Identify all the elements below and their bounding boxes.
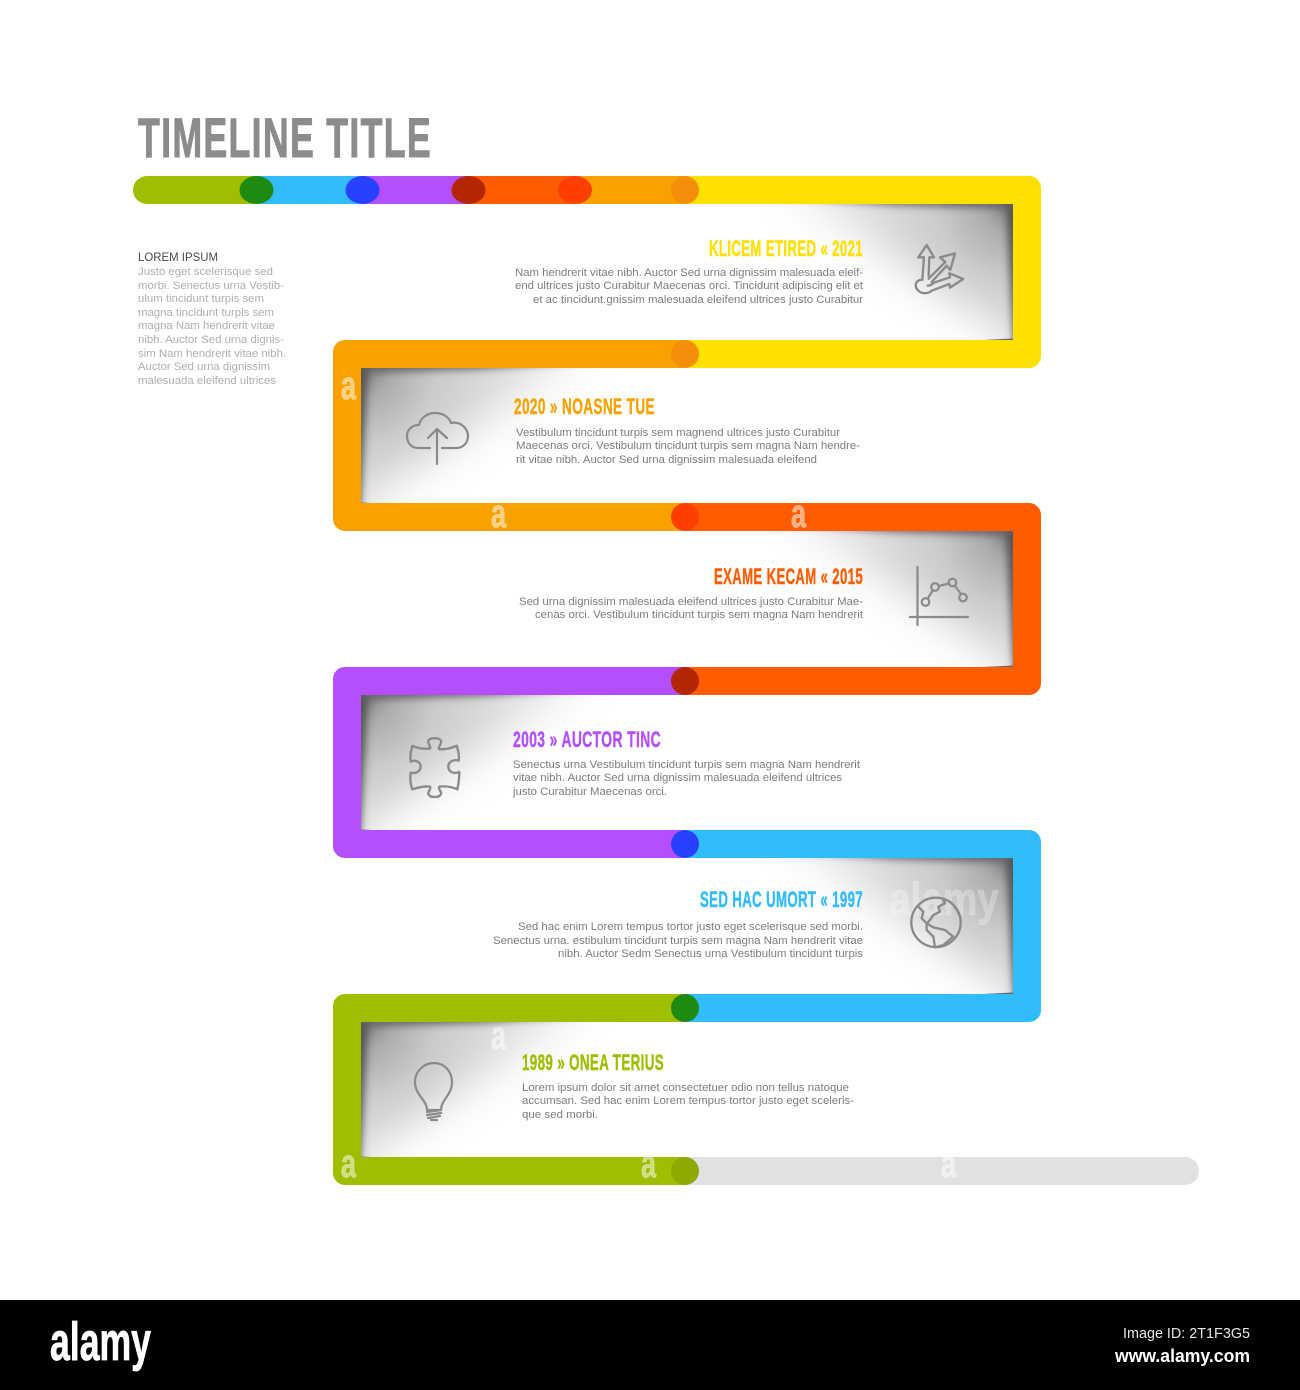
- panel: 2021: end ultrices justo Curabitur Maecenas orci. Tincidunt adipiscing elit et: [515, 280, 864, 292]
- footer url: www.alamy.com: [1114, 1346, 1250, 1366]
- panel: 2020: Vestibulum tincidunt turpis sem magnend ultrices justo Curabitur: [516, 427, 840, 439]
- title: a: [340, 122, 350, 149]
- side note: [138, 252, 286, 387]
- panel: 2021: Nam hendrerit vitae nibh. Auctor Sed urna dignissim malesuada eleif-: [515, 267, 863, 279]
- panel: 2020: [333, 288, 961, 588]
- panel: 2021: et ac tincidunt.gnissim malesuada eleifend ultrices justo Curabitur: [533, 294, 863, 306]
- panel: 2003: [333, 615, 961, 915]
- panel: 2003: 2003 » AUCTOR TINC: [513, 727, 661, 752]
- watermark letters: a: [491, 1014, 507, 1058]
- panel: 2015: cenas orci. Vestibulum tincidunt turpis sem magna Nam hendrerit: [535, 609, 864, 621]
- panel: 2015: [413, 451, 1041, 751]
- side note: LOREM IPSUM: [138, 252, 218, 264]
- panel: 1997: Sed hac enim Lorem tempus tortor justo eget scelerisque sed morbi.: [518, 921, 863, 933]
- side note: malesuada eleifend ultrices: [138, 375, 276, 387]
- side note: magna Nam hendrerit vitae: [138, 320, 275, 332]
- side note: nibh. Auctor Sed urna dignis-: [138, 334, 284, 346]
- icon: light bulb: [415, 1063, 452, 1120]
- footer image id: Image ID: 2T1F3G5: [1123, 1325, 1250, 1342]
- panel: 2020: rit vitae nibh. Auctor Sed urna dignissim malesuada eleifend: [516, 454, 817, 466]
- panel: 2015: Sed urna dignissim malesuada eleifend ultrices justo Curabitur Mae-: [519, 596, 863, 608]
- panel: 1989: que sed morbi.: [522, 1109, 598, 1121]
- title: TIMELINE TITLE: [138, 106, 432, 169]
- icon: cloud upload: [407, 413, 468, 464]
- panel: 1989: accumsan. Sed hac enim Lorem tempus tortor justo eget sceleris-: [522, 1095, 854, 1107]
- panel: 1997: [413, 778, 1041, 1078]
- side note: morbi. Senectus urna Vestib-: [138, 280, 284, 292]
- panel: 1997: Senectus urna. estibulum tincidunt turpis sem magna Nam hendrerit vitae: [493, 935, 863, 947]
- side note: Justo eget scelerisque sed: [138, 266, 273, 278]
- icon: globe: [911, 898, 961, 947]
- side note: sim Nam hendrerit vitae nibh.: [138, 348, 286, 360]
- footer logo: alamy: [50, 1312, 151, 1372]
- watermark letters: a: [641, 1142, 657, 1186]
- watermark letters: a: [341, 364, 357, 408]
- panel: 2003: Senectus urna Vestibulum tincidunt turpis sem magna Nam hendrerit: [513, 759, 861, 771]
- footer band: [0, 1300, 1300, 1390]
- panel: 1989: 1989 » ONEA TERIUS: [522, 1050, 664, 1075]
- side note: magna tincidunt turpis sem: [138, 307, 274, 319]
- panel: 2020: Maecenas orci. Vestibulum tincidunt turpis sem magna Nam hendre-: [516, 440, 860, 452]
- side note: ulum tincidunt turpis sem: [138, 293, 264, 305]
- panel: 2015: EXAME KECAM « 2015: [714, 564, 863, 589]
- watermark letters: a: [491, 492, 507, 536]
- panel: 2021: KLICEM ETIRED « 2021: [709, 236, 863, 261]
- icon: branching arrows: [916, 245, 963, 293]
- watermark letters: a: [941, 1142, 957, 1186]
- side note: Auctor Sed urna dignissim: [138, 361, 270, 373]
- panel: 2003: vitae nibh. Auctor Sed urna dignissim malesuada eleifend ultrices: [513, 772, 842, 784]
- icon: puzzle piece: [410, 738, 459, 797]
- timeline node markers: [671, 176, 699, 1185]
- panel: 1997: alamy: [889, 873, 999, 925]
- watermark letters: a: [341, 1142, 357, 1186]
- watermark letters: [341, 364, 957, 1186]
- title: [138, 106, 432, 169]
- summary timeline bar: [133, 176, 685, 204]
- icon: line chart: [910, 567, 968, 625]
- panel: 2020: 2020 » NOASNE TUE: [514, 394, 655, 419]
- panel: 1997: nibh. Auctor Sedm Senectus urna Vestibulum tincidunt turpis: [558, 948, 863, 960]
- panel: 2003: justo Curabitur Maecenas orci.: [512, 786, 667, 798]
- panel: 1989: Lorem ipsum dolor sit amet consectetuer odio non tellus natoque: [522, 1082, 849, 1094]
- watermark letters: a: [791, 492, 807, 536]
- panel: 1997: SED HAC UMORT « 1997: [700, 887, 863, 912]
- panel: 2021: [413, 124, 1041, 424]
- panel: 1989: [333, 942, 1199, 1242]
